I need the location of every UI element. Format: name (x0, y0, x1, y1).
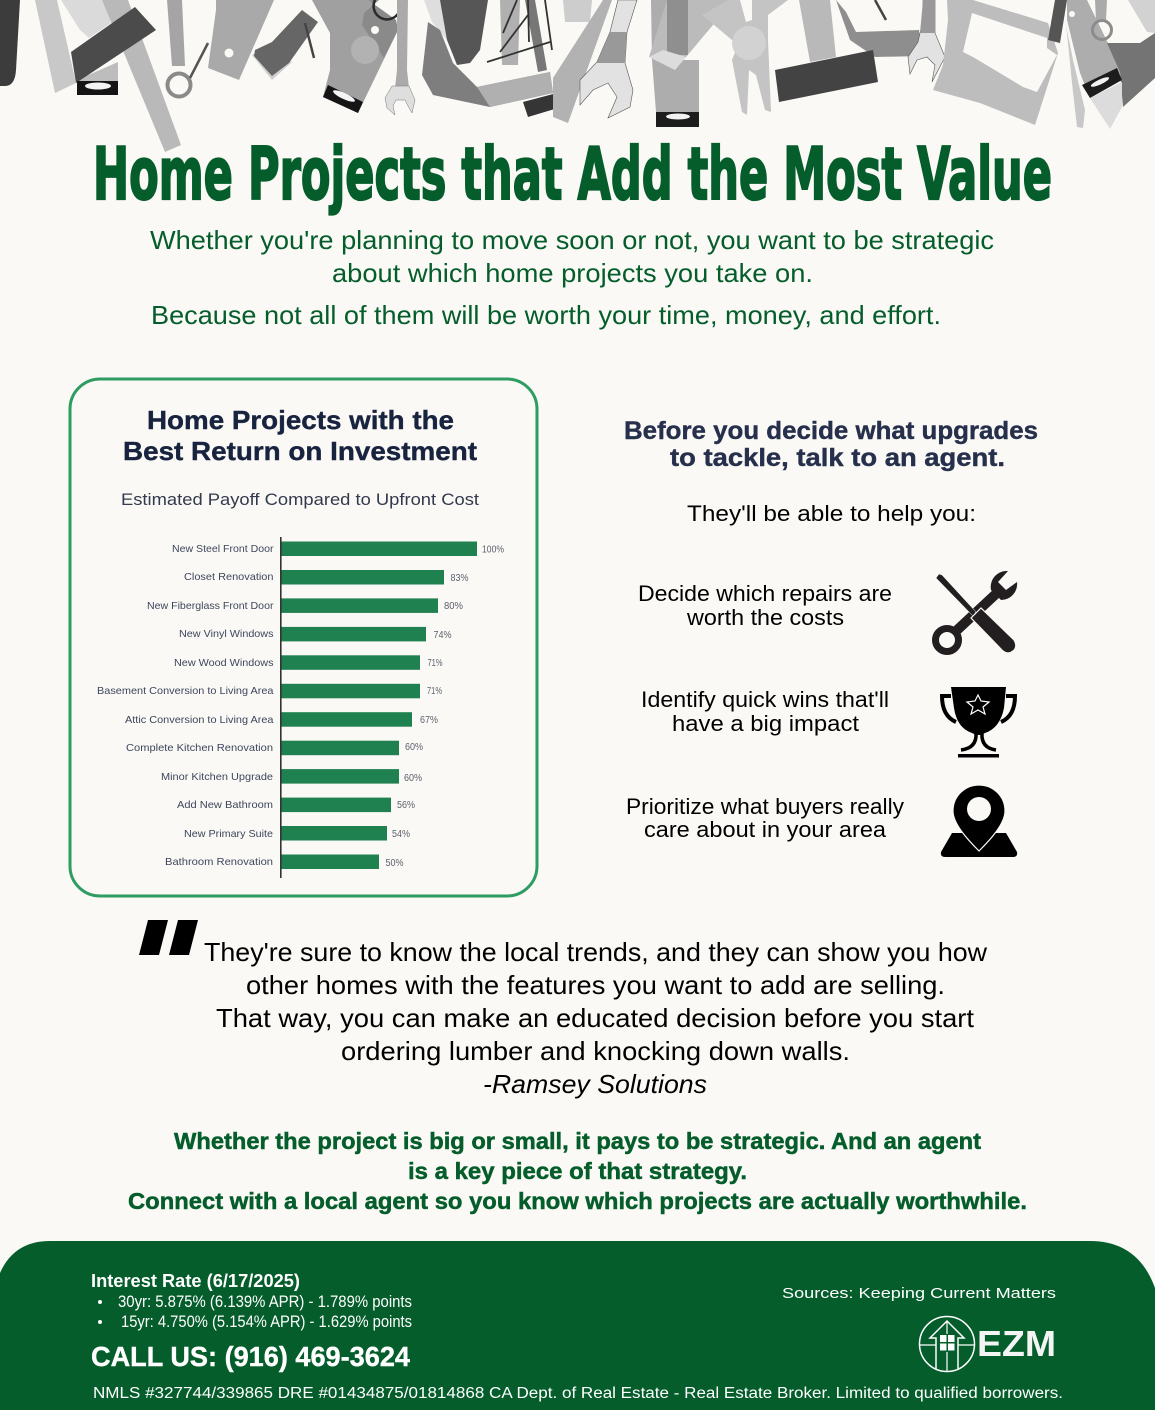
right heading: to tackle, talk to an agent. (670, 444, 1005, 472)
bar chart: 54% (392, 829, 410, 840)
bar chart: 56% (397, 800, 415, 811)
bar chart: 100% (482, 544, 504, 556)
bar chart (97, 537, 504, 878)
right heading (624, 417, 1038, 472)
benefit: repairs: worth the costs (686, 605, 844, 630)
bar chart: Complete Kitchen Renovation (126, 742, 273, 754)
logo: EZM: EZM (977, 1323, 1056, 1364)
quote text: They're sure to know the local trends, and they can show you how (204, 937, 987, 967)
bar chart: New Fiberglass Front Door (147, 600, 274, 612)
benefit: repairs: Decide which repairs are (638, 581, 892, 606)
benefit: quick wins: Identify quick wins that'll (641, 687, 889, 712)
quote mark (139, 920, 198, 955)
right heading: Before you decide what upgrades (624, 417, 1038, 445)
intro text: Whether you're planning to move soon or not, you want to be strategic (150, 225, 994, 255)
benefit: quick wins (641, 687, 889, 736)
bar chart: Bathroom Renovation (165, 856, 273, 868)
benefit: quick wins: have a big impact (672, 711, 859, 736)
benefit: repairs (638, 581, 892, 630)
bar chart: 74% (434, 630, 452, 641)
chart subtitle: Estimated Payoff Compared to Upfront Cost (121, 490, 479, 509)
benefit: buyers (626, 794, 904, 842)
bar chart: New Wood Windows (174, 657, 274, 669)
intro text: Because not all of them will be worth your time, money, and effort. (151, 300, 941, 330)
bar chart: New Steel Front Door (172, 543, 274, 555)
chart heading: Best Return on Investment (123, 436, 477, 466)
tools banner (0, 0, 1155, 152)
interest rate block: Interest Rate (6/17/2025) (91, 1270, 300, 1291)
panel: chart card (70, 379, 537, 896)
bar chart: 67% (420, 715, 438, 726)
green call to action: Whether the project is big or small, it pays to be strategic. And an agent (174, 1128, 981, 1154)
benefit: buyers: Prioritize what buyers really (626, 794, 904, 819)
bar chart: Attic Conversion to Living Area (125, 714, 274, 726)
bar chart: Minor Kitchen Upgrade (161, 771, 273, 783)
intro text (150, 225, 994, 330)
chart heading: Home Projects with the (147, 405, 454, 435)
green call to action: is a key piece of that strategy. (408, 1158, 747, 1184)
bar chart: Basement Conversion to Living Area (97, 685, 274, 697)
footer band (0, 1241, 1155, 1410)
logo: EZM (920, 1316, 1056, 1372)
interest rate block (91, 1270, 412, 1331)
bar chart: New Primary Suite (184, 828, 273, 840)
quote text: other homes with the features you want to add are selling. (246, 970, 945, 1000)
bar chart: 60% (404, 773, 422, 784)
bar chart: 71% (427, 686, 442, 697)
green call to action: Connect with a local agent so you know which projects are actually worthwhile. (128, 1188, 1027, 1214)
sources: Sources: Keeping Current Matters (782, 1286, 1056, 1302)
benefit: buyers: care about in your area (644, 817, 887, 842)
quote text: ordering lumber and knocking down walls. (341, 1036, 850, 1066)
quote text: That way, you can make an educated decision before you start (216, 1003, 975, 1033)
icon: trophy (942, 687, 1015, 758)
chart heading (123, 405, 477, 466)
interest rate block: 15yr: 4.750% (5.154% APR) - 1.629% points (121, 1312, 412, 1331)
quote text (204, 937, 987, 1099)
bar chart: New Vinyl Windows (179, 628, 274, 640)
icon: location pin (941, 785, 1017, 857)
licensing line: NMLS #327744/339865 DRE #01434875/01814868 CA Dept. of Real Estate - Real Estate Broker. Limited to qualified borrowers. (93, 1385, 1063, 1402)
bar chart: 50% (386, 858, 404, 869)
quote text: -Ramsey Solutions (483, 1069, 707, 1099)
bar chart: 80% (444, 601, 463, 612)
phone number: CALL US: (916) 469-3624 (91, 1341, 410, 1372)
green call to action (128, 1128, 1027, 1214)
intro text: about which home projects you take on. (332, 258, 813, 288)
bar chart: 83% (450, 573, 469, 584)
bar chart: Closet Renovation (184, 571, 274, 583)
right intro line: They'll be able to help you: (687, 501, 976, 526)
bar chart: 71% (428, 658, 443, 669)
bar chart: Add New Bathroom (177, 799, 273, 811)
icon: wrench and screwdriver (936, 571, 1017, 653)
bar chart: 60% (405, 742, 423, 753)
interest rate block: 30yr: 5.875% (6.139% APR) - 1.789% points (118, 1292, 412, 1311)
